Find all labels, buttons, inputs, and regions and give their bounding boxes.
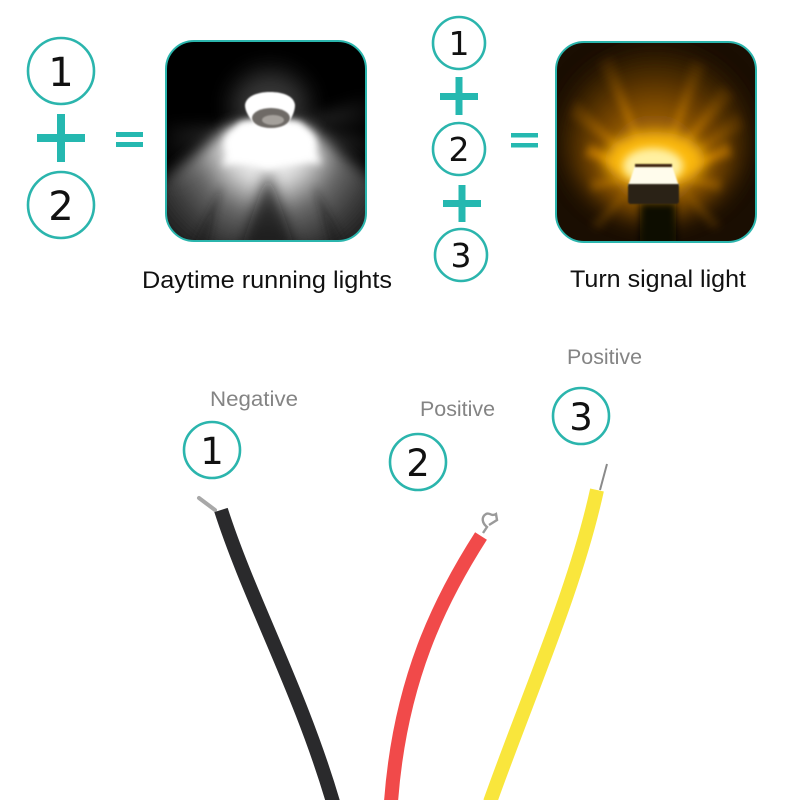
number 2	[28, 172, 94, 238]
number 3: 3	[450, 236, 472, 275]
equals sign	[511, 133, 538, 148]
plus sign	[440, 77, 478, 115]
dark column	[640, 203, 676, 248]
lamp base	[628, 184, 679, 204]
side rays	[170, 102, 365, 174]
number 2: 2	[48, 184, 74, 230]
caption: turn signal light: Turn signal light	[570, 266, 746, 293]
badge 3: 3	[569, 396, 593, 439]
badge 2	[390, 434, 446, 490]
light rays	[570, 56, 744, 230]
equation: turn signal light	[433, 17, 538, 281]
label: positive wire 3: Positive	[567, 346, 642, 369]
number 3	[435, 229, 487, 281]
lamp slot	[635, 164, 672, 167]
equals sign	[116, 132, 143, 147]
lamp lens	[252, 108, 290, 128]
equation: daytime running lights	[28, 38, 143, 238]
number 1: 1	[48, 50, 74, 96]
yellow core	[605, 132, 705, 188]
badge 1	[184, 422, 240, 478]
caption: daytime running lights: Daytime running lights	[142, 267, 392, 294]
badge 2: 2	[406, 442, 430, 485]
lamp body	[245, 92, 295, 124]
black wire	[199, 498, 333, 800]
red wire	[391, 514, 497, 800]
lamp lit part	[628, 166, 679, 186]
badge 1: 1	[200, 430, 224, 473]
label: negative: Negative	[210, 388, 298, 411]
photo: white daytime light	[165, 40, 367, 242]
bare lead	[600, 464, 607, 490]
number 2: 2	[448, 130, 470, 169]
bare lead	[483, 514, 497, 533]
number 1: 1	[448, 24, 470, 63]
amber glow	[563, 50, 747, 220]
number 1	[28, 38, 94, 104]
number 2	[433, 123, 485, 175]
badge 3	[553, 388, 609, 444]
plus sign	[37, 114, 85, 162]
soft haze	[167, 114, 365, 240]
dark central cone	[240, 170, 296, 250]
yellow wire	[490, 464, 607, 800]
label: positive wire 2: Positive	[420, 398, 495, 421]
plus sign	[443, 185, 481, 222]
photo: amber turn signal	[556, 42, 756, 248]
bare lead	[199, 498, 215, 510]
bright glow	[222, 122, 322, 168]
number 1	[433, 17, 485, 69]
